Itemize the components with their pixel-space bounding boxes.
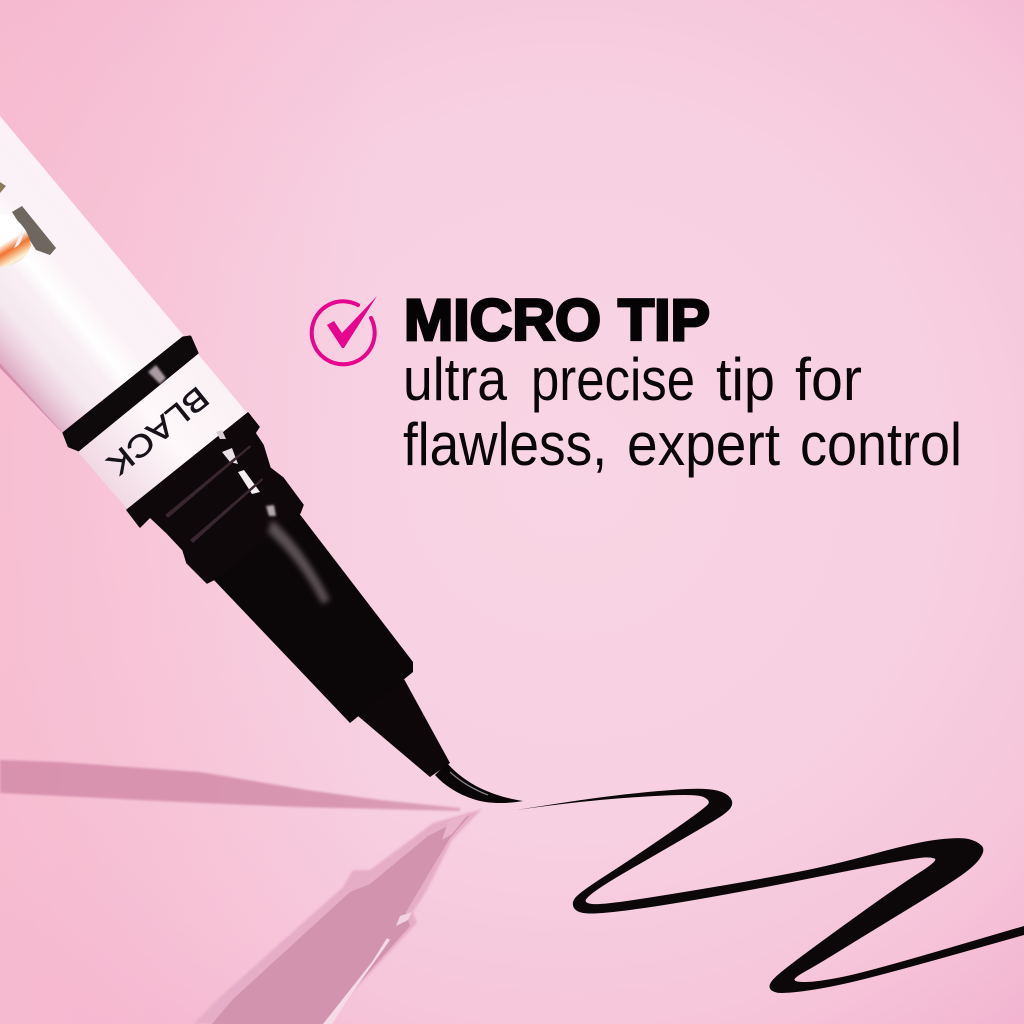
description line 1: precise	[531, 346, 695, 413]
nib	[345, 668, 450, 777]
description line 2: control	[800, 411, 962, 478]
text block	[403, 288, 962, 478]
pen body	[0, 116, 184, 432]
curved brush tip	[435, 763, 523, 803]
brush highlights	[450, 772, 488, 795]
description line 2: flawless,	[403, 411, 607, 478]
check mark	[327, 296, 377, 348]
heading: MICRO	[404, 288, 601, 353]
stepped black collar	[127, 413, 303, 583]
description line 1	[403, 346, 862, 413]
white label band	[78, 354, 248, 510]
cone sheen	[268, 520, 330, 604]
heading: TIP	[618, 288, 710, 353]
ring highlight	[148, 365, 166, 384]
black ring	[64, 337, 197, 450]
eyeliner pen	[0, 116, 523, 803]
shade label: BLACK: BLACK	[100, 380, 216, 483]
check badge icon	[312, 296, 377, 364]
pen reflection	[193, 809, 482, 1024]
description line 1: ultra	[403, 346, 508, 413]
collar highlights	[165, 430, 276, 543]
cast shadow of pen	[0, 760, 460, 811]
description line 2: expert	[627, 411, 780, 478]
circle outline	[312, 301, 375, 364]
tapered cone	[212, 495, 413, 723]
heading	[404, 288, 710, 353]
warm left wash	[0, 0, 380, 1024]
description line 1: for	[795, 346, 862, 413]
body lower rim	[0, 363, 66, 437]
holographic logo	[0, 182, 56, 267]
description line 2	[403, 411, 962, 478]
eyeliner stroke	[516, 789, 1024, 993]
description line 1: tip	[716, 346, 775, 413]
